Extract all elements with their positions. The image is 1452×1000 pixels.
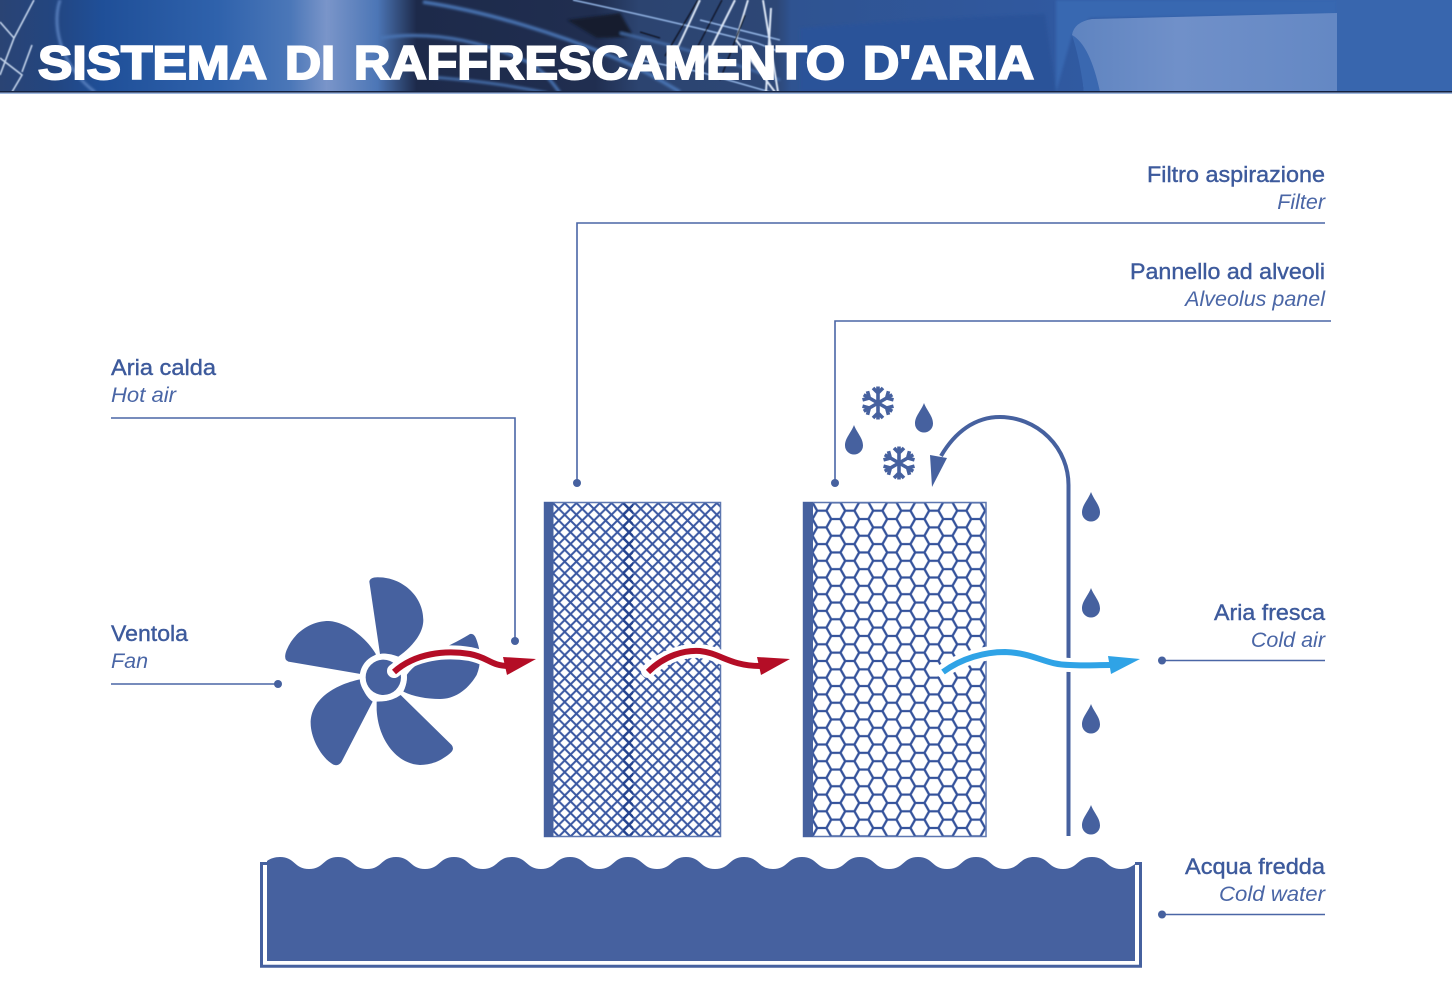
alveolus panel xyxy=(803,502,986,837)
water tank xyxy=(262,857,1140,966)
label: fan xyxy=(111,621,282,688)
title: RAFFRESCAMENTO xyxy=(354,36,845,89)
banner bottom edge xyxy=(0,91,1452,94)
label: cold water: Cold water xyxy=(1219,882,1326,906)
arrow: hot air from fan xyxy=(394,652,536,675)
label: filter xyxy=(573,162,1326,487)
label: hot air xyxy=(111,355,519,645)
label: alveolus panel: Alveolus panel xyxy=(1183,287,1326,311)
label: alveolus panel: Pannello ad alveoli xyxy=(1130,259,1325,284)
icon: snowflake 2 xyxy=(882,446,916,480)
label: cold water: Acqua fredda xyxy=(1185,854,1325,879)
icon: snowflake 1 xyxy=(861,386,895,420)
label: cold air xyxy=(1158,600,1326,664)
arrow: cold air xyxy=(943,652,1140,674)
label: cold air: Cold air xyxy=(1251,628,1326,652)
label: cold water xyxy=(1158,854,1326,918)
title xyxy=(38,36,1034,89)
label: alveolus panel xyxy=(831,259,1331,487)
fan guard wires xyxy=(0,0,780,92)
banner background photo xyxy=(0,0,1452,93)
label: hot air: Hot air xyxy=(111,383,177,407)
label: cold air: Aria fresca xyxy=(1214,600,1325,625)
icon: droplets xyxy=(845,403,1100,834)
label: hot air: Aria calda xyxy=(111,355,217,380)
filter panel xyxy=(544,502,720,837)
header banner xyxy=(0,0,1452,94)
arrow: hot air through filter xyxy=(648,651,790,675)
label: fan: Ventola xyxy=(111,621,188,646)
label: filter: Filter xyxy=(1277,190,1326,214)
title: DI xyxy=(285,36,335,89)
title: D'ARIA xyxy=(863,36,1034,89)
title: SISTEMA xyxy=(38,36,267,89)
icon: fan xyxy=(285,577,480,765)
recirculating water pipe arrow xyxy=(930,417,1069,836)
label: fan: Fan xyxy=(111,649,148,673)
pillow xyxy=(1072,13,1337,92)
label: filter: Filtro aspirazione xyxy=(1147,162,1325,187)
